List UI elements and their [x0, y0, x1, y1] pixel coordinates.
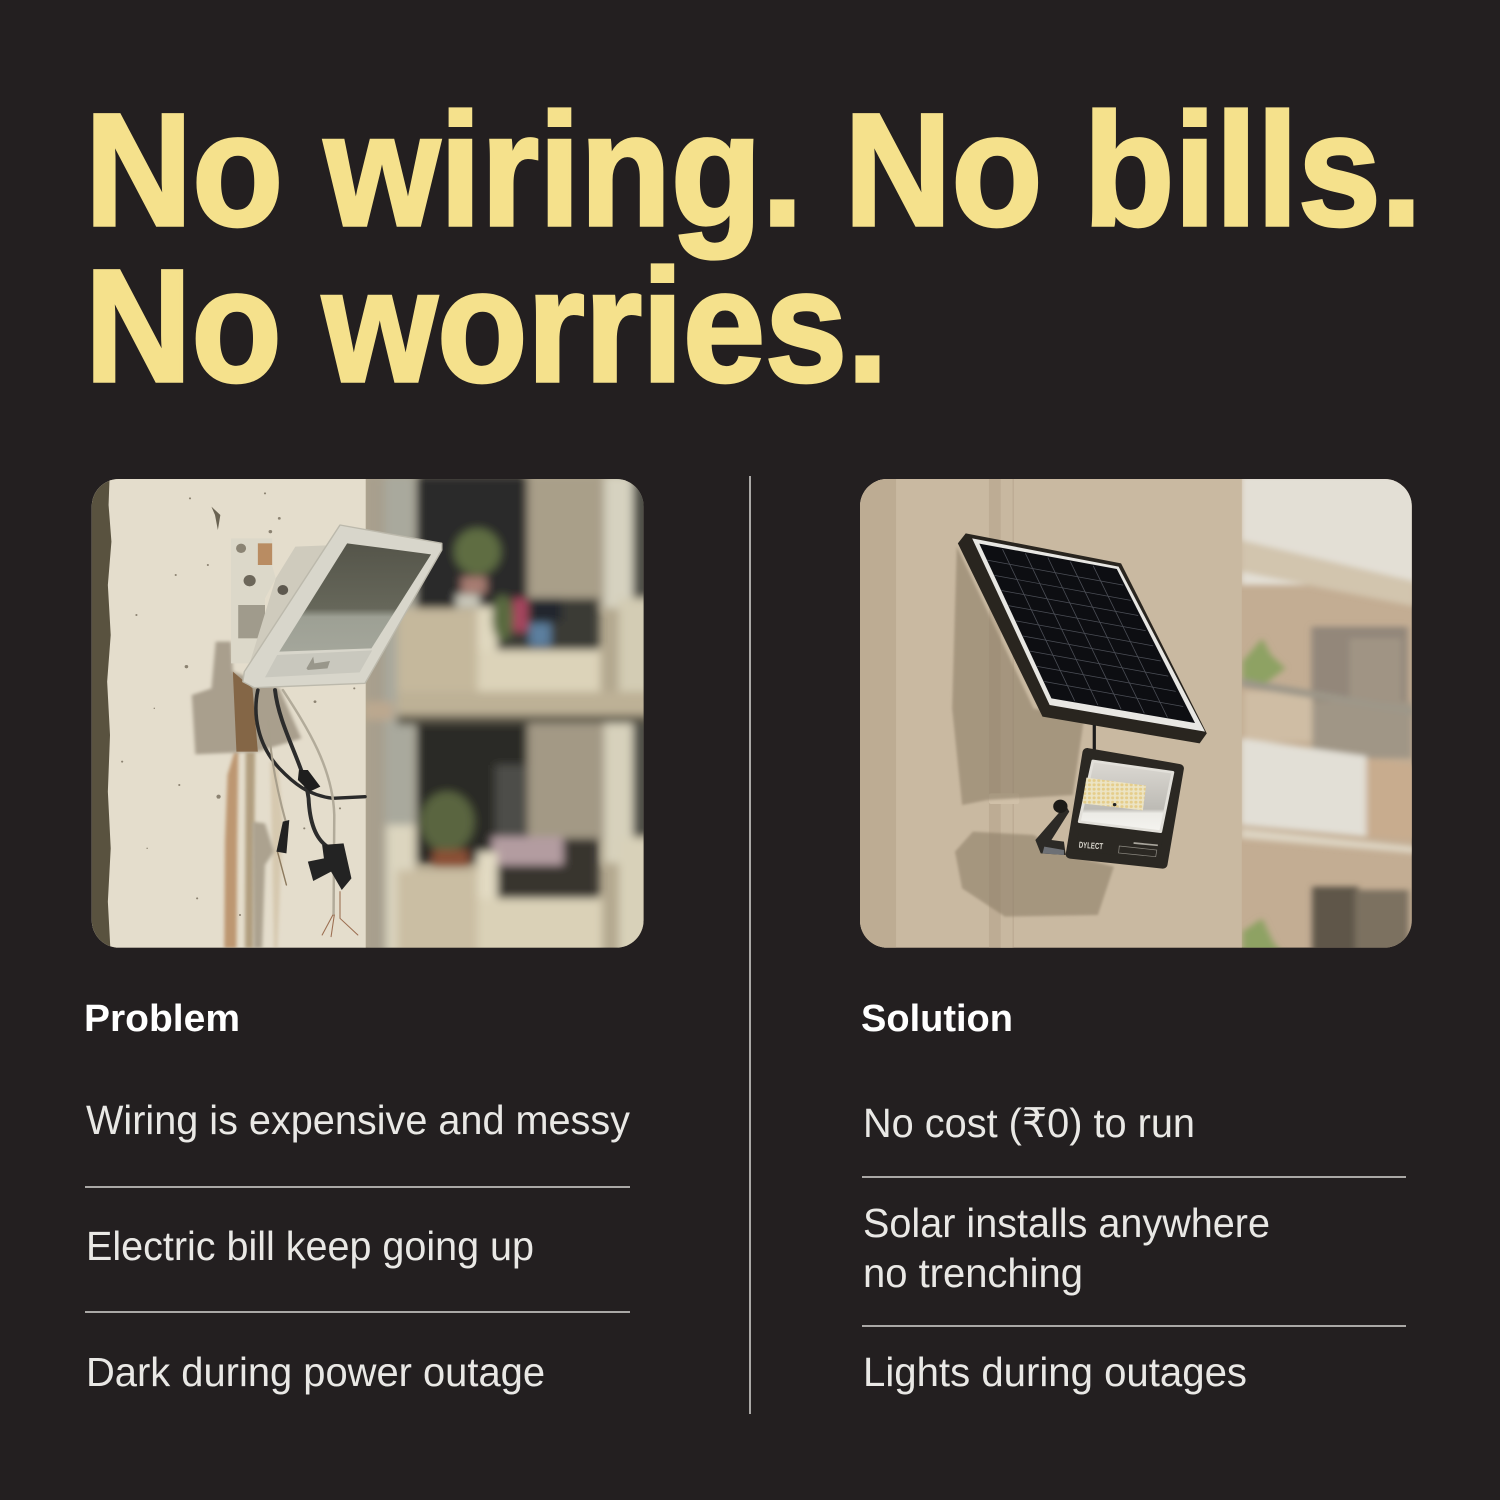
- solution list: Lights during outages: [863, 1349, 1247, 1395]
- stains and rust: [224, 752, 283, 948]
- problem list: [85, 1097, 630, 1395]
- photo: solar floodlight on a wall: [860, 479, 1412, 948]
- cable: [1092, 725, 1096, 750]
- panel: solution text: [861, 998, 1406, 1395]
- downpipe: [989, 475, 1014, 955]
- solar panel: [958, 533, 1207, 743]
- heading: solution: Solution: [861, 998, 1013, 1040]
- wall shadows: [952, 547, 1114, 917]
- wires: [256, 690, 365, 937]
- problem list: Dark during power outage: [86, 1349, 545, 1395]
- problem list: Electric bill keep going up: [86, 1223, 534, 1269]
- title: No worries.: [85, 236, 888, 415]
- solution list: Solar installs anywhere: [863, 1200, 1270, 1246]
- bracket: [231, 642, 234, 664]
- photo: old wired floodlight on a wall: [92, 479, 644, 948]
- floodlight: DYLECT: [1078, 840, 1104, 851]
- floodlight body: [250, 546, 326, 660]
- wall shadow: [192, 642, 301, 948]
- heading: problem: Problem: [84, 998, 240, 1040]
- solution list: [862, 1100, 1406, 1395]
- title: [85, 80, 1422, 415]
- panel: problem text: [84, 998, 630, 1395]
- wall: [855, 475, 1242, 955]
- wall speckles: [121, 492, 355, 916]
- title: No wiring. No bills.: [85, 80, 1422, 259]
- wall: [90, 475, 366, 955]
- right building: [855, 475, 1415, 955]
- problem list: Wiring is expensive and messy: [86, 1097, 630, 1143]
- solution list: no trenching: [863, 1250, 1083, 1296]
- solution list: No cost (₹0) to run: [863, 1100, 1195, 1146]
- floodlight: [1035, 752, 1179, 864]
